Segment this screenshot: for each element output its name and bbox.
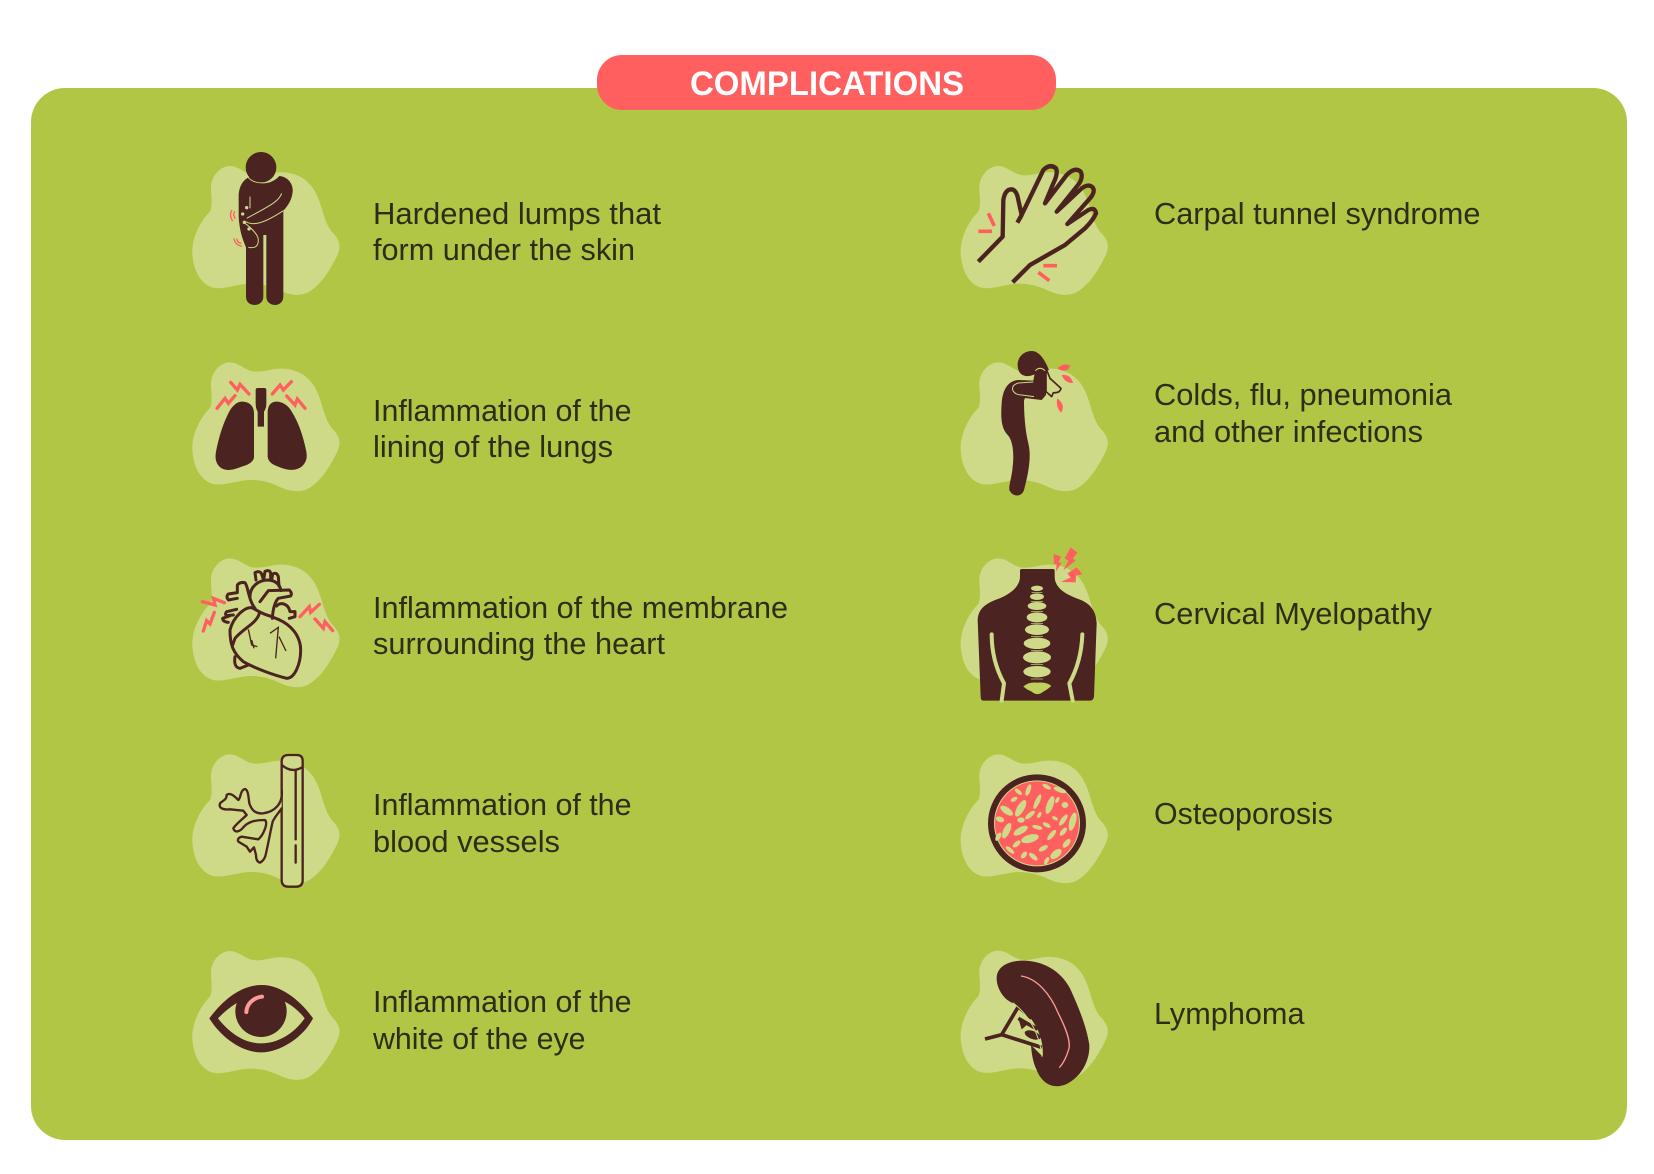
text: lung lining: lining of the lungs	[373, 430, 613, 464]
text: lymphoma: Lymphoma	[1154, 997, 1305, 1031]
title: complications badge	[597, 55, 1056, 110]
text: blood vessels: Inflammation of the	[373, 788, 632, 822]
text: heart membrane: Inflammation of the membrane	[373, 591, 788, 625]
text: eye	[372, 985, 632, 1056]
text: blood vessels	[373, 788, 632, 859]
text: carpal tunnel: Carpal tunnel syndrome	[1154, 197, 1480, 231]
text: lung lining	[373, 394, 632, 464]
text: eye: Inflammation of the	[373, 985, 632, 1019]
item: heart membrane	[192, 558, 788, 687]
title: complications badge: COMPLICATIONS	[690, 65, 964, 103]
text: hardened lumps: form under the skin	[373, 233, 635, 267]
icon: blood vessel	[192, 754, 339, 887]
item: lung lining	[192, 362, 632, 491]
text: hardened lumps	[373, 197, 662, 267]
icon: spleen	[961, 951, 1108, 1086]
text: infections: and other infections	[1154, 415, 1423, 449]
icon: back and spine	[961, 547, 1108, 701]
icon: porous bone	[961, 754, 1108, 883]
text: infections	[1154, 378, 1452, 449]
item: blood vessels	[192, 754, 632, 887]
text: osteoporosis: Osteoporosis	[1154, 797, 1333, 831]
item: eye	[192, 951, 632, 1080]
icon: heart	[192, 558, 339, 687]
item: lymphoma	[961, 951, 1305, 1086]
icon: lungs	[192, 362, 339, 491]
item: hardened lumps	[192, 152, 662, 305]
text: infections: Colds, flu, pneumonia	[1154, 378, 1452, 412]
item: infections	[961, 351, 1452, 495]
text: eye: white of the eye	[372, 1022, 586, 1056]
item: osteoporosis	[961, 754, 1333, 883]
text: cervical myelopathy: Cervical Myelopathy	[1154, 597, 1433, 631]
text: heart membrane	[373, 591, 788, 661]
icon: person with lumps on arm	[192, 152, 339, 305]
text: lung lining: Inflammation of the	[373, 394, 632, 428]
icon: hand	[961, 166, 1108, 295]
text: blood vessels: blood vessels	[373, 825, 560, 859]
item: carpal tunnel	[961, 166, 1480, 295]
icon: sneezing person	[961, 351, 1108, 495]
icon: eye	[192, 951, 339, 1080]
item: cervical myelopathy	[961, 547, 1433, 701]
text: hardened lumps: Hardened lumps that	[373, 197, 662, 231]
text: heart membrane: surrounding the heart	[373, 627, 666, 661]
